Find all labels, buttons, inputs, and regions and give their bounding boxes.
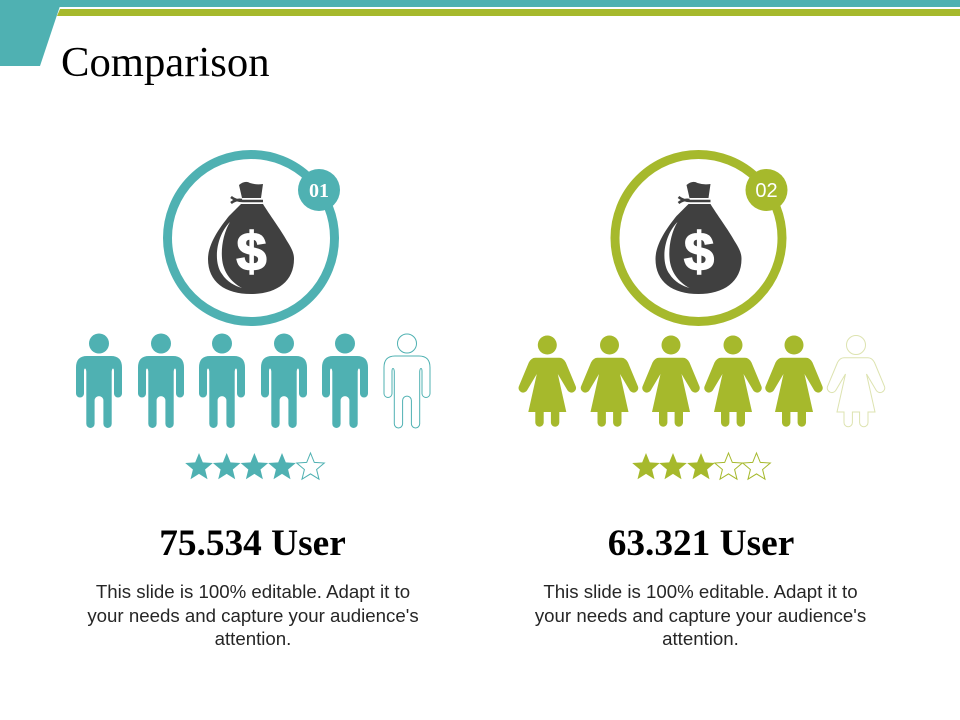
ring: teal <box>168 154 334 322</box>
description: This slide is 100% editable. Adapt it to <box>543 581 858 602</box>
ring: green <box>615 154 782 322</box>
badge: 02 <box>746 169 788 211</box>
header: teal corner tab <box>0 0 62 66</box>
title: Comparison <box>61 39 270 86</box>
value: 63.321 User: 63.321 User <box>608 523 794 564</box>
panel: 02 female users <box>519 154 885 649</box>
panel: 01 male users <box>76 154 430 649</box>
description: attention. <box>662 628 739 649</box>
description: your needs and capture your audience's <box>87 605 419 626</box>
badge: 01: 01 <box>309 180 329 202</box>
badge: 01 <box>298 169 340 211</box>
value: 75.534 User: 75.534 User <box>159 523 346 564</box>
icon: money bag: $ <box>684 222 714 282</box>
description: This slide is 100% editable. Adapt it to <box>96 581 410 602</box>
icon row: people, five of six filled <box>519 336 885 427</box>
icon: money bag: $ <box>236 222 267 282</box>
rating: four of five stars <box>185 453 324 479</box>
icon: money bag <box>656 182 742 294</box>
icon row: people, five of six filled <box>76 334 430 428</box>
header: green bar <box>57 9 960 16</box>
icon: money bag <box>208 182 294 294</box>
badge: 02: 02 <box>755 180 778 202</box>
header: teal bar <box>50 0 960 7</box>
rating: three of five stars <box>632 453 770 479</box>
description: your needs and capture your audience's <box>535 605 866 626</box>
description: attention. <box>215 628 291 649</box>
